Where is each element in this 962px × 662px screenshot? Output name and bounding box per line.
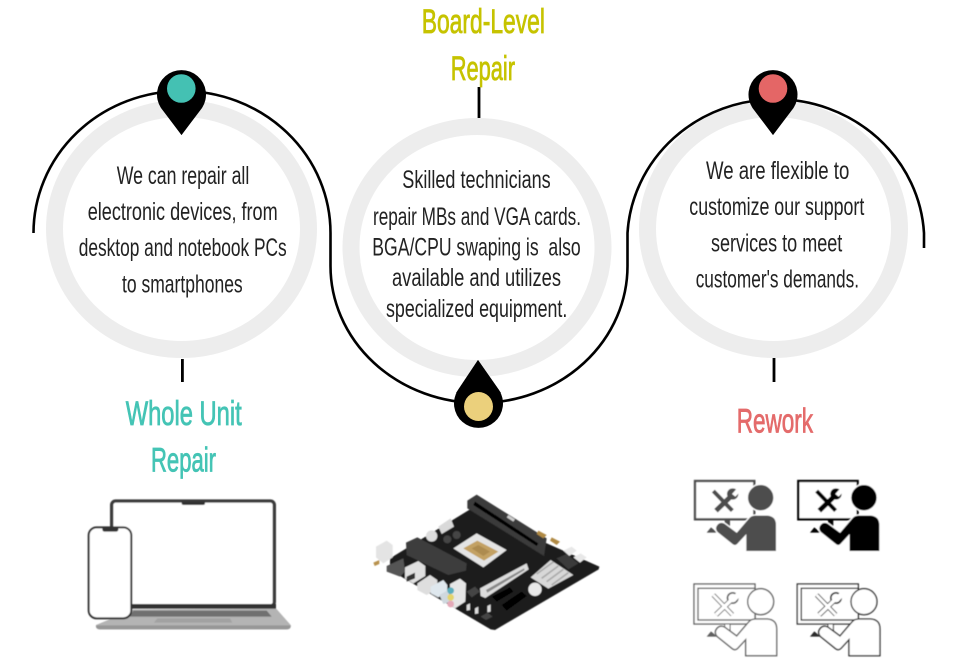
icon: yellow drop pin: [454, 360, 503, 428]
heading: whole unit repair: Repair: [151, 442, 216, 480]
icon: laptop and phone: [89, 501, 291, 629]
panel: whole unit repair ring: [54, 108, 308, 350]
text block: whole unit description: electronic devices, from: [88, 198, 278, 226]
text block: whole unit description: desktop and notebook PCs: [79, 234, 287, 262]
icon: red map pin: [748, 70, 797, 135]
panel: board-level repair ring: [351, 126, 603, 368]
heading: board-level repair: Board-Level: [422, 3, 545, 41]
VRM heatsink: [406, 537, 467, 575]
heading: whole unit repair: [126, 395, 242, 480]
text block: whole unit description: We can repair all: [117, 162, 249, 190]
chipset heatsink: [531, 560, 573, 589]
CPU socket: [453, 533, 507, 567]
RAM slots: [467, 495, 547, 556]
connecting wave line: [34, 91, 924, 403]
text block: rework description: We are flexible to: [706, 157, 849, 185]
heading: whole unit repair: Whole Unit: [126, 395, 242, 433]
heading: rework: Rework: [737, 403, 814, 441]
text block: whole unit description: [79, 162, 287, 299]
PCIe slot: [480, 563, 529, 598]
text block: rework description: services to meet: [711, 230, 842, 258]
text block: board-level description: available and utilizes: [392, 264, 561, 292]
heading: board-level repair: Repair: [451, 50, 515, 88]
connector: whole unit: [181, 359, 184, 382]
text block: board-level description: repair MBs and VGA cards.: [373, 203, 581, 231]
panel: rework ring: [648, 108, 900, 350]
text block: board-level description: specialized equipment.: [386, 295, 567, 323]
text block: board-level description: Skilled technicians: [402, 166, 551, 194]
icon: technician dark outline: [797, 584, 880, 656]
icon: technician black: [798, 481, 880, 552]
disc and chips: [528, 583, 542, 596]
text block: whole unit description: to smartphones: [122, 271, 243, 299]
heading: board-level repair: [422, 3, 545, 88]
power pins: [438, 518, 454, 534]
icon: motherboard: [373, 495, 599, 630]
text block: rework description: [689, 157, 864, 293]
text block: rework description: customize our support: [689, 193, 864, 221]
icon: technician grey outline: [694, 584, 777, 656]
rear IO: [376, 541, 393, 563]
icon: teal map pin: [157, 70, 206, 135]
icon: technician dark grey: [695, 481, 777, 552]
connector: board-level: [478, 87, 480, 118]
text block: rework description: customer's demands.: [696, 265, 859, 293]
right connectors: [537, 531, 547, 538]
text block: board-level description: [372, 166, 581, 323]
connector: rework: [773, 358, 775, 382]
text block: board-level description: BGA/CPU swaping is also: [372, 234, 581, 262]
